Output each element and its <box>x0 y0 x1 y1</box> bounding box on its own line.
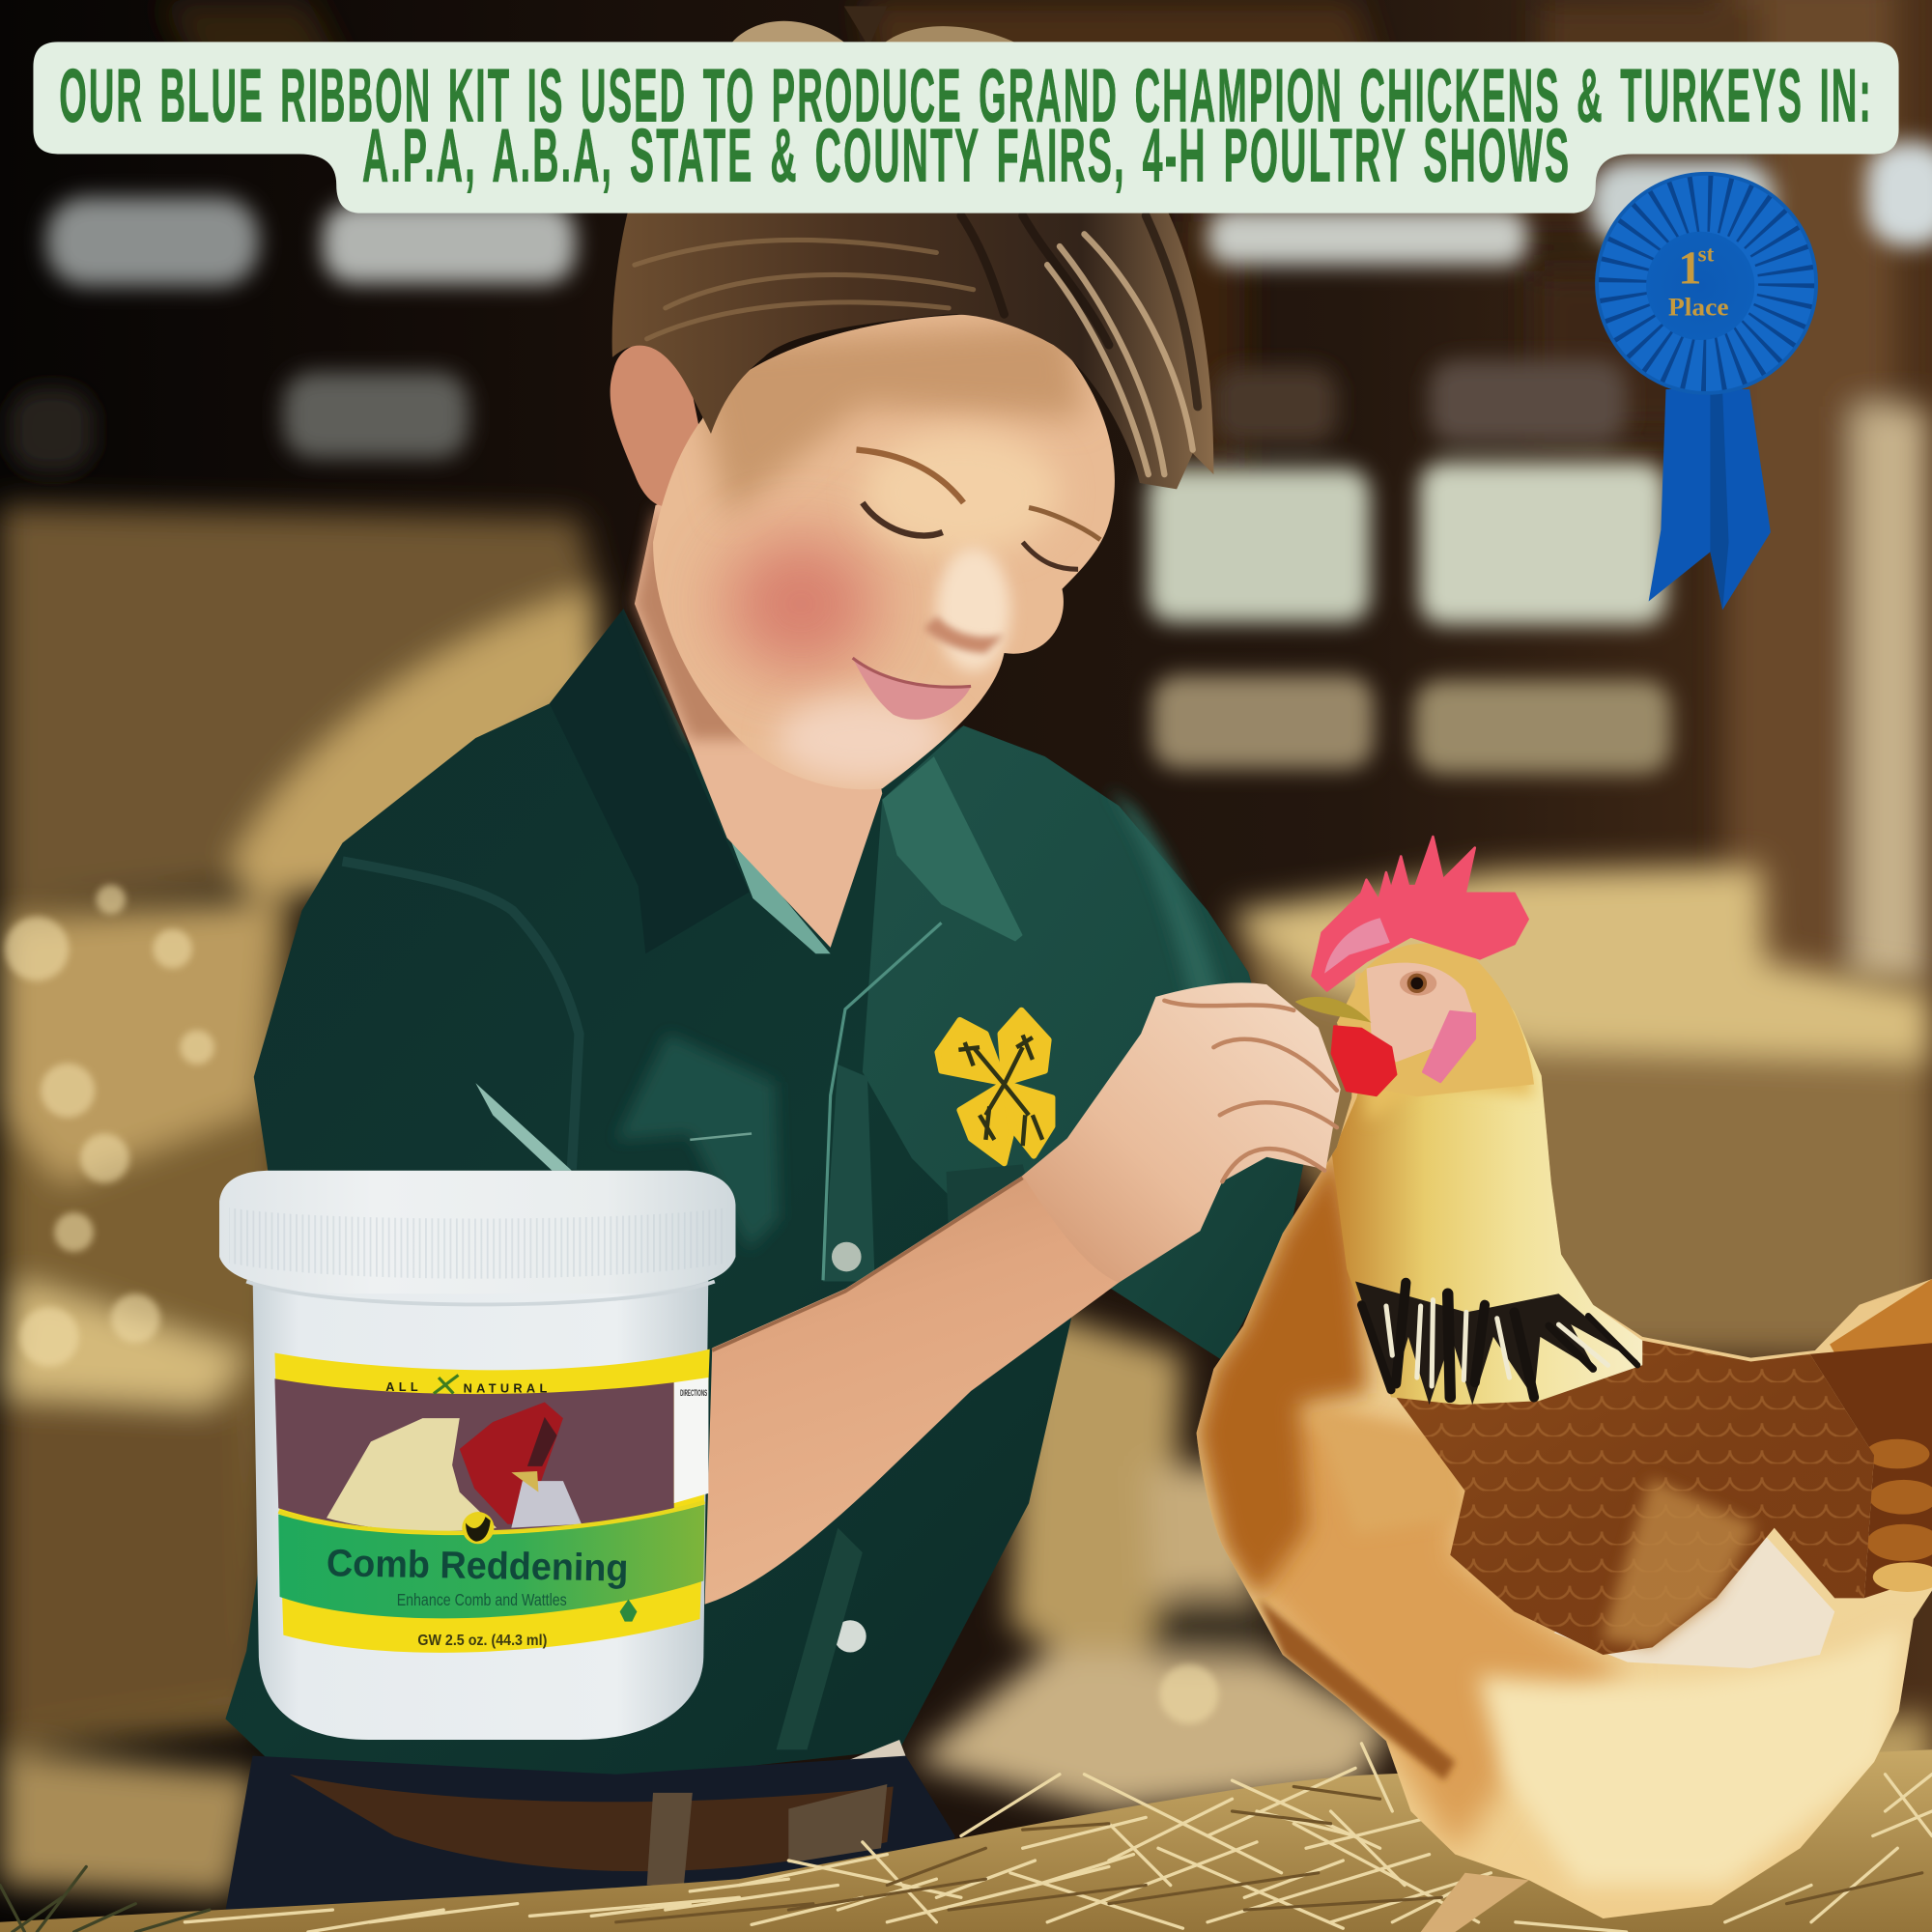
chicken: tail feathers <box>1865 1439 1932 1592</box>
jar shoulder ring <box>246 1282 715 1304</box>
ribbon tails <box>1649 389 1771 610</box>
jar label: green band <box>278 1504 705 1618</box>
chicken: tail dark <box>1810 1343 1932 1598</box>
boy: face <box>653 315 1115 789</box>
boy: leather belt <box>290 1775 894 1871</box>
jar label: hen photo <box>274 1378 674 1532</box>
boy: neck <box>635 493 882 948</box>
chicken: wattle <box>1332 1026 1396 1095</box>
boy: finger creases <box>1164 1001 1337 1181</box>
boy: shirt torso <box>225 609 1303 1780</box>
chicken: cream underbelly <box>1479 1627 1904 1886</box>
chicken: comb <box>1312 837 1528 991</box>
boy: jeans <box>222 1756 955 1932</box>
chicken: hackle tips <box>1386 1300 1608 1386</box>
chicken: body plumage <box>1182 948 1932 1932</box>
all natural wordmark: ALL <box>385 1379 422 1394</box>
chicken: pale flight feathers <box>1553 1525 1834 1668</box>
chicken: tail upper <box>1830 1279 1932 1355</box>
boy: ear <box>611 344 699 506</box>
straw bedding at the bottom <box>0 1744 1932 1932</box>
chicken: eye <box>1400 971 1436 996</box>
chicken: black hackle feathers <box>1361 1283 1637 1397</box>
chicken: neck golden top <box>1355 958 1534 1122</box>
chicken: head <box>1337 944 1534 1096</box>
chicken: golden flank <box>1233 1405 1627 1855</box>
jar label: yellow band <box>274 1350 710 1653</box>
rosette centre <box>1646 232 1754 340</box>
boy: hair <box>612 210 1213 489</box>
jar label: directions panel <box>674 1378 708 1503</box>
jar label: yellow stripe above green <box>278 1502 705 1533</box>
boy: forearm <box>705 1139 1119 1605</box>
product name: Comb Reddening <box>327 1542 629 1590</box>
chicken: ear lobe <box>1423 1011 1475 1082</box>
chicken: dark wing <box>1396 1341 1874 1655</box>
jar lid <box>219 1171 735 1293</box>
product tagline: Enhance Comb and Wattles <box>397 1590 567 1609</box>
net weight: GW 2.5 oz. (44.3 ml) <box>417 1633 547 1649</box>
chicken: lower edge band <box>1258 1598 1455 1780</box>
boy: facial features <box>853 450 1100 720</box>
chicken: legs <box>1421 1873 1529 1932</box>
1st: st <box>1698 242 1715 266</box>
boy: hair highlights <box>635 215 1198 474</box>
chicken: hackle dark band <box>1355 1282 1638 1405</box>
all natural wordmark: NATURAL <box>464 1380 552 1395</box>
Place: Place <box>1668 293 1729 322</box>
chicken: wing feather scales <box>1396 1341 1874 1655</box>
product jar <box>219 1171 735 1740</box>
boy: forearm upper edge <box>712 1178 1023 1350</box>
boy: neck shading <box>635 505 752 739</box>
1st <box>1678 242 1715 294</box>
boy: shirt details <box>343 609 1303 1799</box>
banner background <box>33 42 1899 213</box>
boy: tuft of hair above the banner <box>727 6 1029 49</box>
jar body <box>252 1269 708 1740</box>
boy: hand <box>1023 982 1341 1283</box>
chicken: comb shading <box>1324 918 1390 974</box>
jar label: directions panel: DIRECTIONS <box>680 1388 707 1398</box>
icon: small hen badge <box>462 1512 494 1544</box>
chicken: brown breast <box>1197 1148 1368 1598</box>
boy: belt buckle <box>647 1784 887 1886</box>
rosette pleats <box>1596 173 1817 394</box>
blue ribbon award <box>1596 173 1817 610</box>
icon: small logo seal <box>620 1600 637 1622</box>
chicken: face patch <box>1367 963 1475 1062</box>
icon: 4-H clover emblem <box>938 1010 1052 1163</box>
chicken: wing tan scales <box>1602 1479 1756 1647</box>
all natural wordmark <box>385 1375 552 1395</box>
1st: 1 <box>1678 242 1701 294</box>
chicken: beak <box>1295 997 1372 1023</box>
chicken: neck <box>1332 948 1642 1405</box>
chicken: breast scales <box>1330 1420 1464 1526</box>
